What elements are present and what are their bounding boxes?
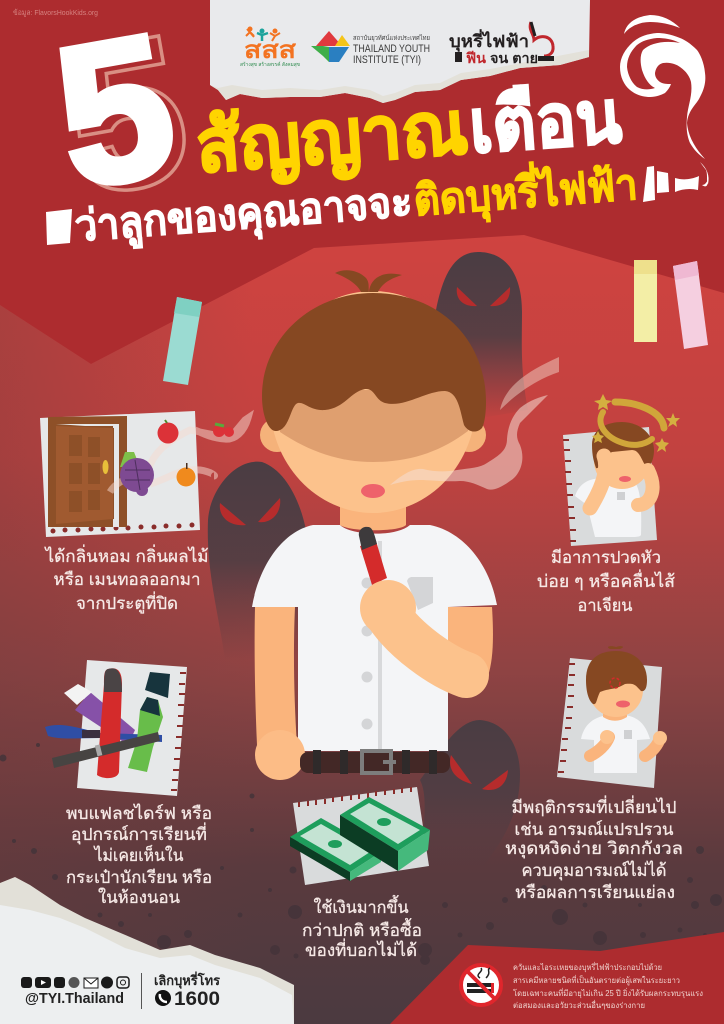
right hand and forearm (388, 615, 466, 675)
neck (340, 500, 406, 530)
left arm (255, 607, 297, 745)
logo: thailand youth institute (311, 31, 430, 66)
panel: door and scent (40, 411, 248, 537)
sticky note: pink (673, 261, 708, 349)
caption: usb and stationery (66, 803, 212, 907)
paint splatter (0, 743, 722, 965)
ears (260, 418, 486, 452)
sticky note: teal (163, 297, 202, 385)
caption: behaviour change: หรือผลการเรียนแย่ลง (515, 883, 675, 902)
caption: usb and stationery: ในห้องนอน (98, 887, 180, 907)
quitline: 1600 (174, 989, 220, 1010)
caption: money: ใช้เงินมากขึ้น (314, 895, 409, 917)
icon: title left vape block (46, 209, 72, 245)
icon: no smoking (461, 965, 501, 1005)
warning note: ควันและไอระเหยของบุหรี่ไฟฟ้าประกอบไปด้วย (513, 961, 662, 972)
caption: usb and stationery: ไม่เคยเห็นใน (93, 844, 184, 865)
bottom-right red panel (390, 932, 724, 1024)
title line 1: สัญญาณ (193, 86, 471, 190)
top torn paper (210, 0, 590, 103)
arm: back right upper (448, 607, 493, 676)
warning note: ต่อสมองและอวัยวะส่วนอื่นๆของร่างกาย (513, 999, 645, 1010)
caption: scent: จากประตูที่ปิด (76, 591, 178, 614)
placket (378, 541, 382, 751)
caption: behaviour change: มีพฤติกรรมที่เปลี่ยนไป (512, 795, 676, 817)
title line 1: เตือน (467, 75, 624, 168)
caption: usb and stationery: กระเป๋านักเรียน หรือ (66, 868, 212, 887)
panel: headache (563, 394, 680, 546)
title line 2: ว่าลูกของคุณอาจจะ (73, 178, 414, 254)
quitline: เลิกบุหรี่โทร (154, 971, 220, 989)
caption: scent: ได้กลิ่นหอม กลิ่นผลไม้ (43, 544, 209, 566)
logo: sss: สสส (244, 37, 296, 64)
panel: money (290, 787, 430, 885)
caption: money: กว่าปกติ หรือซื้อ (302, 918, 422, 940)
caption: headache (537, 548, 676, 615)
quitline (141, 971, 220, 1010)
logo: vape campaign: บุหรี่ไฟฟ้า (449, 29, 529, 52)
caption: headache: อาเจียน (578, 596, 633, 615)
panel: behaviour change (557, 646, 667, 788)
social handle: @TYI.Thailand (25, 991, 124, 1007)
forehead shadow (280, 390, 470, 462)
warning note: สารเคมีหลายชนิดที่เป็นอันตรายต่อผู้เสพในระยะยาว (513, 974, 680, 986)
caption: usb and stationery: อุปกรณ์การเรียนที่ (71, 822, 207, 845)
shadow ghost: lower right (420, 720, 520, 870)
caption: money: ของที่บอกไม่ได้ (305, 938, 417, 960)
caption: scent: หรือ เมนทอลออกมา (54, 570, 200, 589)
logo: vape campaign: จน ตาย (490, 50, 538, 66)
caption: behaviour change: เช่น อารมณ์แปรปรวน (514, 820, 674, 839)
belt (300, 750, 450, 774)
bottom torn paper (0, 877, 294, 1024)
shadow ghost: upper right (436, 252, 528, 420)
caption: headache: มีอาการปวดหัว (551, 548, 661, 567)
title line 1 (193, 75, 624, 190)
caption: behaviour change: ควบคุมอารมณ์ไม่ได้ (522, 860, 666, 881)
logo: vape campaign: ฟีน (465, 50, 486, 66)
title line 2: ติดบุหรี่ไฟฟ้า (412, 154, 639, 228)
caption: behaviour change: หงุดหงิดง่าย วิตกกังวล (505, 839, 683, 859)
warning note: โดยเฉพาะคนที่มีอายุไม่เกิน 25 ปี ยิ่งได้รับผลกระทบรุนแรง (513, 987, 703, 998)
main character (252, 270, 559, 780)
social icons (21, 976, 129, 988)
hair (262, 293, 486, 432)
shadow ghost: left (208, 462, 320, 660)
exhaled smoke (390, 395, 548, 490)
title line 2 (73, 154, 639, 254)
logo: sss (240, 26, 300, 68)
caption: usb and stationery: พบแฟลชไดร์ฟ หรือ (66, 803, 212, 823)
big number 5: 5 (52, 0, 200, 235)
logo: thailand youth institute: INSTITUTE (TYI) (353, 54, 421, 66)
panel: usb and stationery (45, 660, 187, 796)
mouth (361, 484, 385, 498)
big number 5: 5 (52, 0, 200, 235)
caption: scent (43, 544, 209, 614)
caption: money (302, 895, 422, 960)
pocket (407, 577, 433, 610)
shirt (252, 525, 497, 751)
caption: headache: บ่อย ๆ หรือคลื่นไส้ (537, 569, 676, 591)
warning note (513, 961, 703, 1010)
caption: behaviour change (505, 795, 683, 902)
icon: vape with smoke swirl (620, 15, 709, 202)
face (270, 291, 476, 513)
logo: sss: สร้างสุข สร้างสรรค์ สังคมสุข (240, 61, 300, 68)
logo: thailand youth institute: THAILAND YOUTH (353, 43, 430, 55)
source credit: ข้อมูล: FlavorsHookKids.org (13, 8, 98, 17)
vape device (359, 527, 387, 585)
buttons (362, 578, 372, 730)
logo: thailand youth institute: สถาบันยุวทัศน์แห่งประเทศไทย (353, 34, 430, 42)
hair tuft (335, 270, 402, 292)
logo: vape campaign (449, 22, 554, 66)
sticky note: yellow (634, 260, 657, 342)
